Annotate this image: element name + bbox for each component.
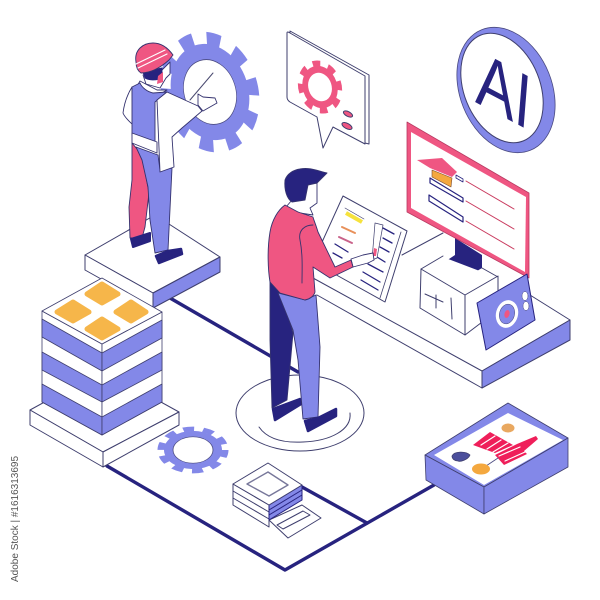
server top xyxy=(42,278,162,344)
report navy blob xyxy=(452,452,470,461)
worker figure xyxy=(123,43,217,263)
gear pointer line xyxy=(190,73,213,100)
monitor xyxy=(407,122,529,278)
server bands right xyxy=(102,320,162,371)
speech bubble xyxy=(287,31,369,148)
analyst front shoe xyxy=(305,409,336,431)
analyst hair xyxy=(285,168,327,202)
worker collar xyxy=(136,81,167,97)
analyst hand xyxy=(351,253,374,267)
worker helmet xyxy=(136,43,173,73)
AI label: AI xyxy=(474,35,534,146)
worker shirt back xyxy=(123,87,133,125)
standing circle xyxy=(236,375,364,451)
graduation cap xyxy=(417,158,457,187)
AI badge xyxy=(439,13,573,167)
report orange dot xyxy=(502,424,514,432)
clipboard entries xyxy=(333,208,394,290)
stylus tip xyxy=(373,248,377,256)
stock credit: Adobe Stock | #1616313695 xyxy=(10,456,21,582)
worker platform xyxy=(85,215,220,308)
server stack xyxy=(42,278,162,435)
monitor stand xyxy=(443,238,482,277)
bubble gear xyxy=(294,58,346,116)
analyst neck and face xyxy=(286,183,317,215)
stylus device xyxy=(372,223,383,260)
analyst purple leg xyxy=(278,293,320,419)
analyst navy leg xyxy=(270,282,293,408)
report orange blob xyxy=(472,464,490,474)
worker neck and face xyxy=(143,62,170,88)
server base xyxy=(30,370,179,467)
worker neck pink xyxy=(157,72,163,84)
worker coat and arm xyxy=(157,92,202,172)
shelf xyxy=(313,220,570,388)
clipboard xyxy=(313,196,407,302)
large gear xyxy=(152,26,268,158)
worker hand xyxy=(198,94,217,111)
analyst sweater xyxy=(268,205,353,300)
stack body xyxy=(233,484,269,527)
small gear xyxy=(161,429,225,471)
server orange tiles xyxy=(57,284,146,338)
report chart xyxy=(473,432,538,465)
cube box xyxy=(420,256,498,335)
worker back shoe xyxy=(131,233,150,247)
tablet buttons xyxy=(522,292,529,310)
control tablet xyxy=(477,274,535,350)
analyst back shoe xyxy=(273,399,301,420)
worker purple leg xyxy=(136,147,172,253)
lower sheet xyxy=(269,505,321,538)
stack top xyxy=(233,463,302,505)
connector lines xyxy=(107,298,434,570)
bubble dash marks xyxy=(341,110,354,131)
monitor text lines xyxy=(466,181,514,249)
server bands left xyxy=(42,319,102,371)
worker pink leg xyxy=(129,143,149,238)
analyst figure xyxy=(268,168,374,431)
sweater arm line xyxy=(300,225,313,283)
monitor bars xyxy=(429,175,463,222)
document stack xyxy=(233,463,321,538)
worker hair xyxy=(143,68,162,80)
plus and minus marks xyxy=(425,294,452,319)
report connector xyxy=(486,458,498,466)
worker front shoe xyxy=(156,249,182,263)
tablet dial xyxy=(493,298,521,330)
helmet stripes xyxy=(136,50,167,68)
report box xyxy=(425,403,568,514)
worker belt xyxy=(132,133,157,153)
worker vest xyxy=(132,83,167,143)
